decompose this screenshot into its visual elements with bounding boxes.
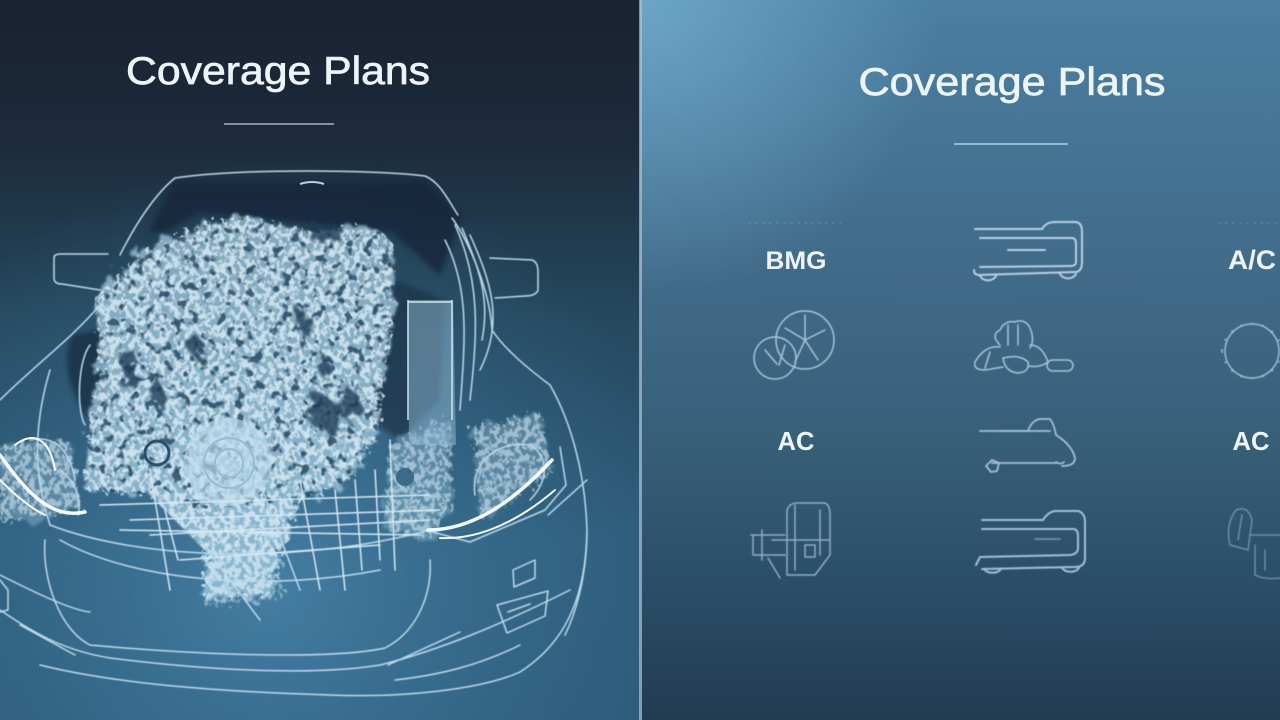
windshield dark band: [148, 182, 462, 275]
icon: partial part right: [1228, 509, 1280, 579]
top badge: [300, 182, 324, 184]
left title: Coverage Plans: [126, 50, 430, 93]
engine body: [0, 218, 552, 606]
faint caption marks: [748, 222, 1280, 224]
label: BMG: BMG: [766, 247, 826, 275]
icon: gears left: [754, 311, 834, 379]
illustration: wireframe car with engine: [0, 171, 587, 696]
label: A/C: A/C: [1228, 245, 1276, 275]
pulleys: [145, 441, 169, 465]
panel: left engine background: [0, 0, 640, 720]
right title: Coverage Plans: [858, 61, 1166, 104]
icon: ring: [1222, 323, 1280, 379]
panel: right coverage background: [640, 0, 1280, 720]
icon: truck top: [974, 222, 1082, 280]
icon: truck bottom: [976, 511, 1085, 573]
icon: parts pile: [975, 321, 1073, 373]
icon: pipework: [751, 503, 830, 578]
label: AC left: AC: [778, 426, 815, 456]
car line work: [0, 171, 587, 696]
intake column: [408, 300, 456, 445]
headlight highlights: [0, 438, 555, 538]
engine dark gaps: [122, 222, 363, 437]
icon: van: [980, 419, 1075, 472]
label: AC right: AC: [1232, 426, 1270, 456]
